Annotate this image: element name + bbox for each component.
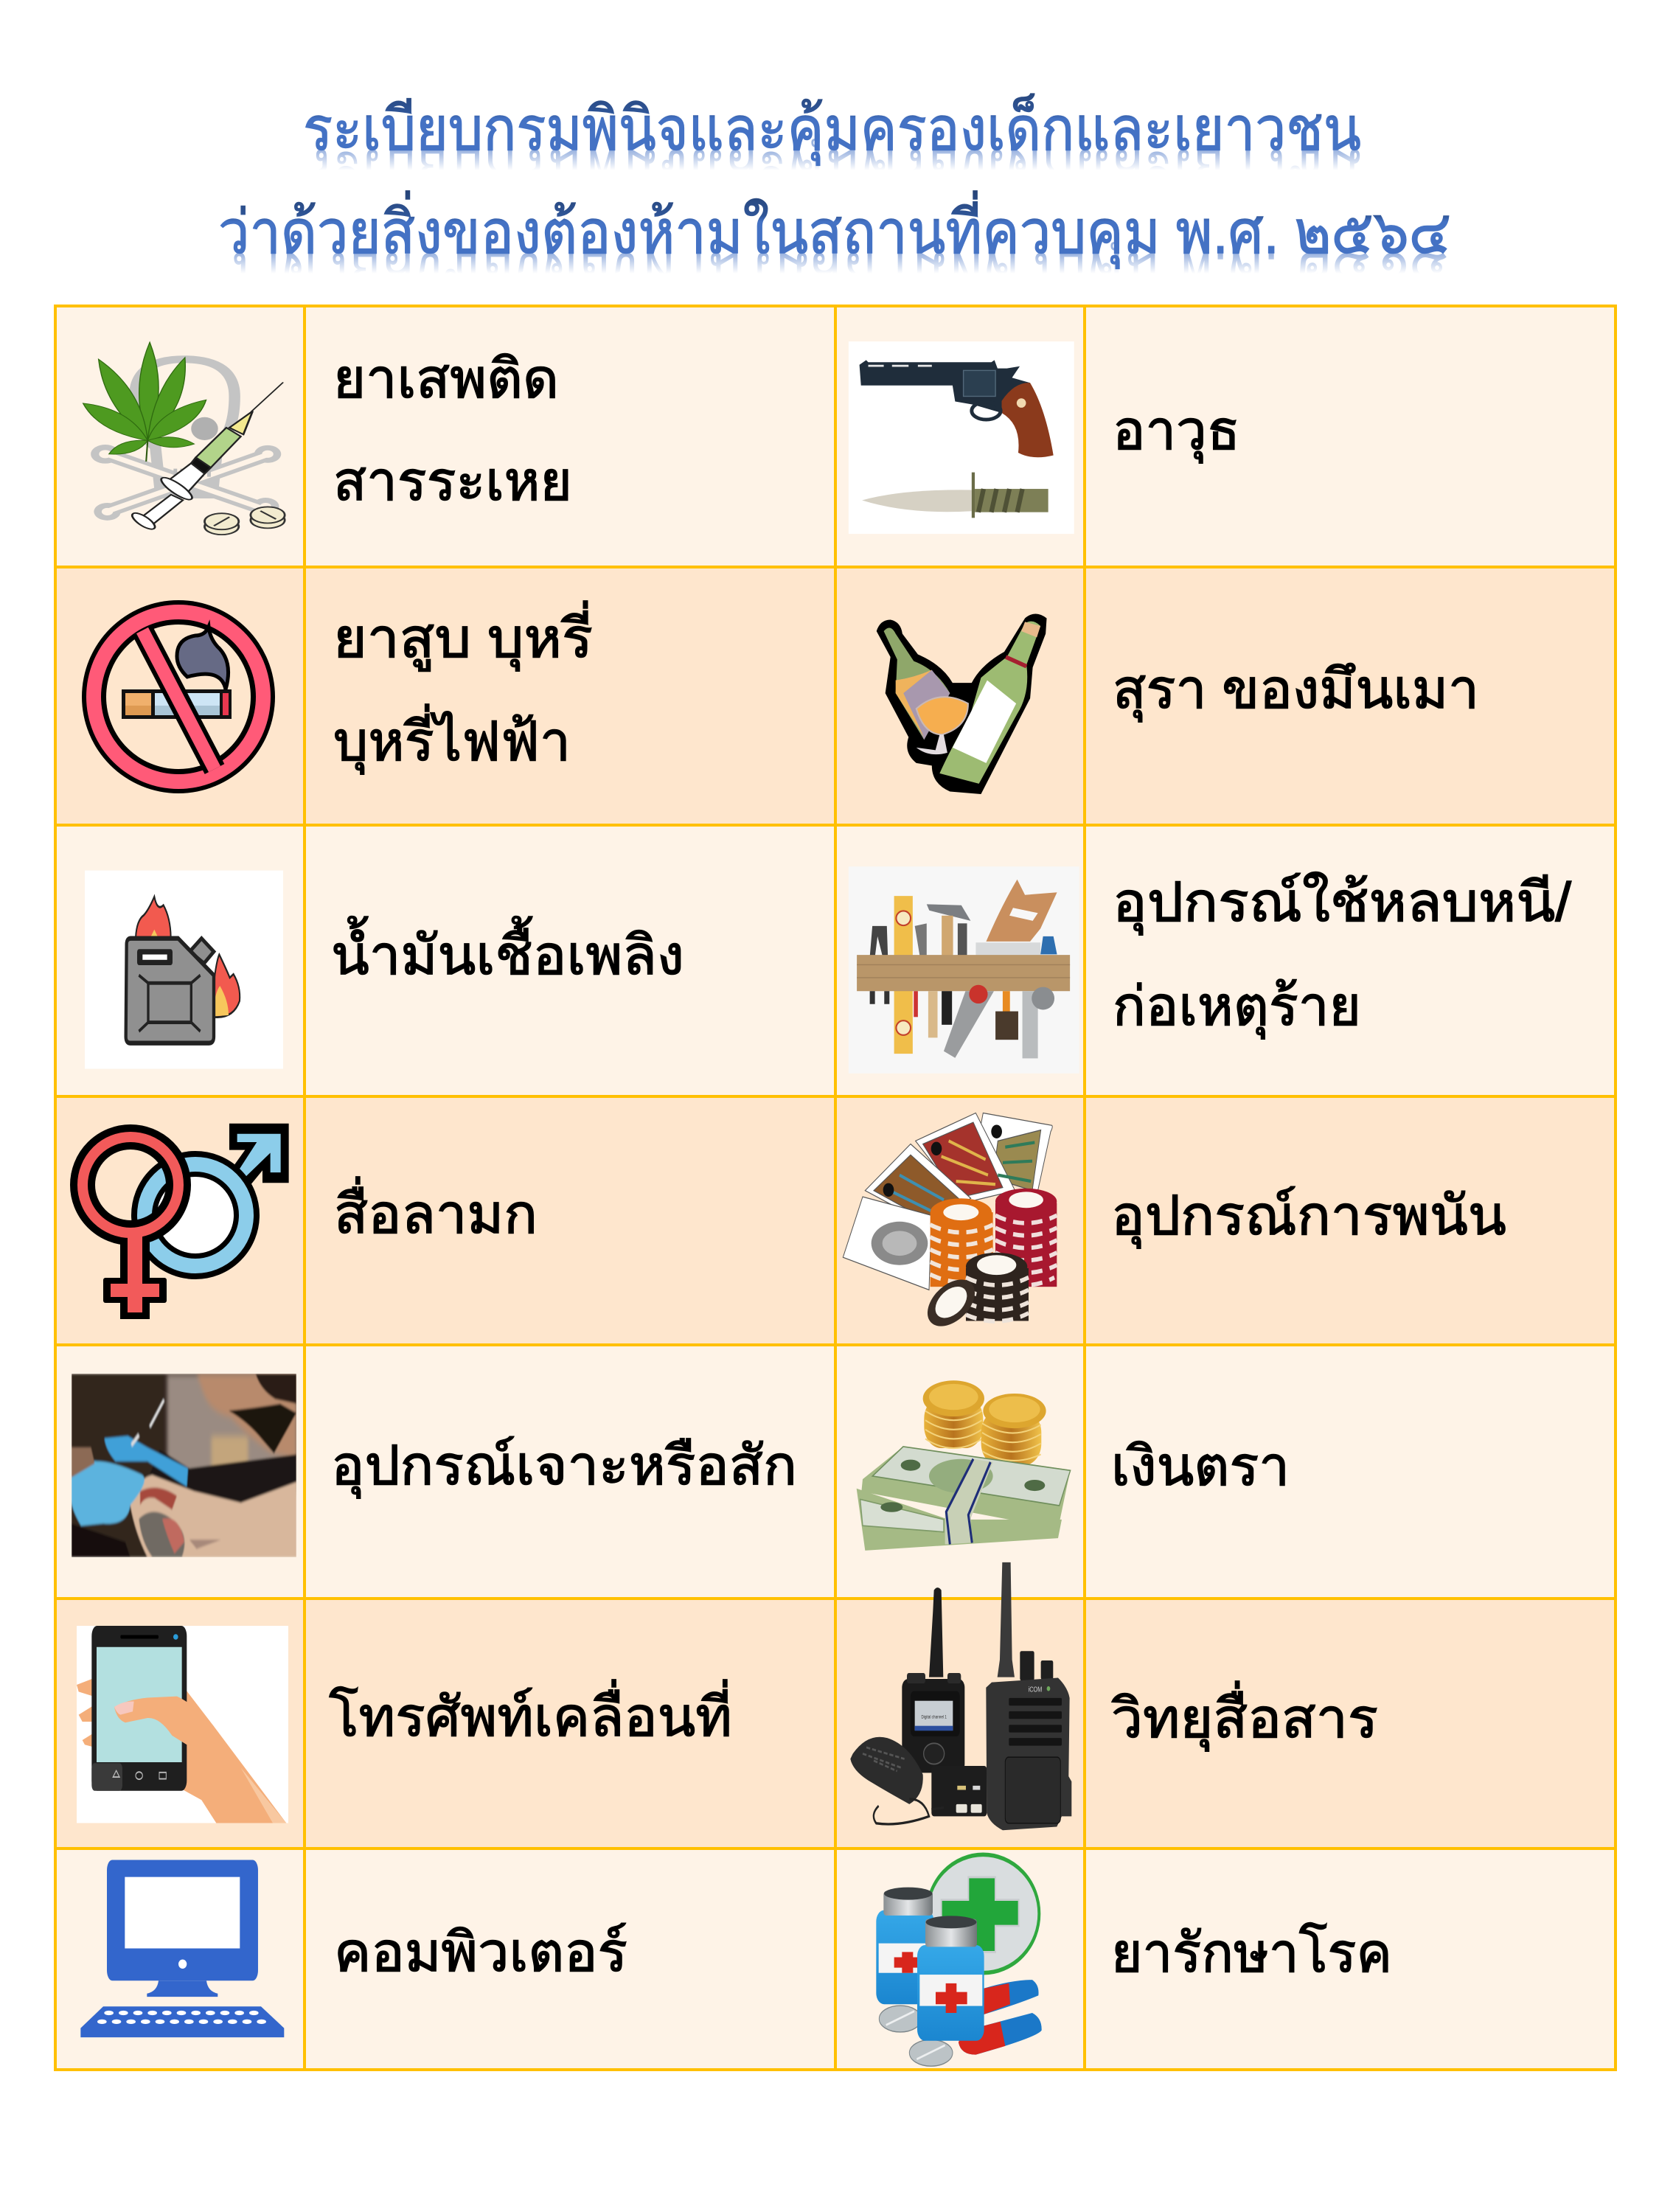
label: gambling equipment: อุปกรณ์การพนัน (1111, 1185, 1506, 1249)
icon: coins and cash (857, 1380, 1071, 1551)
label: narcotics (333, 348, 572, 512)
label: tobacco: ยาสูบ บุหรี่ (333, 600, 593, 672)
label: tobacco: บุหรี่ไฟฟ้า (333, 703, 571, 775)
icon: playing cards and chips (843, 1113, 1057, 1336)
label: weapons: อาวุธ (1113, 400, 1240, 464)
label: narcotics: ยาเสพติด (333, 348, 559, 409)
icon: tattoo photo (72, 1374, 296, 1557)
icon: phone in hand (77, 1626, 288, 1823)
label: alcohol: สุรา ของมึนเมา (1113, 658, 1479, 723)
label: narcotics: สารระเหย (333, 451, 572, 512)
title: ว่าด้วยสิ่งของต้องห้ามในสถานที่ควบคุม พ.ศ. ๒๕๖๔ (218, 237, 1451, 316)
label: radio: วิทยุสื่อสาร (1111, 1680, 1378, 1752)
label: piercing and tattoo equipment: อุปกรณ์เจาะหรือสัก (331, 1435, 797, 1499)
icon: walkie talkies: iCOM (1029, 1685, 1042, 1694)
label: mobile phone: โทรศัพท์เคลื่อนที่ (329, 1679, 732, 1747)
label: escape or crime tools: อุปกรณ์ใช้หลบหนี/ (1113, 872, 1571, 936)
title: ระเบียบกรมพินิจและคุ้มครองเด็กและเยาวชน (303, 133, 1361, 206)
label: pornography: สื่อลามก (334, 1176, 538, 1245)
label: escape or crime tools: ก่อเหตุร้าย (1113, 975, 1361, 1040)
title: ระเบียบกรมพินิจและคุ้มครองเด็กและเยาวชน (303, 93, 1361, 166)
icon: gender symbols (83, 1124, 288, 1319)
label: fuel: น้ำมันเชื้อเพลิง (331, 916, 684, 986)
label: medicine: ยารักษาโรค (1111, 1922, 1392, 1983)
icon: walkie talkies: Digital channel 1 (921, 1715, 947, 1720)
label: computer: คอมพิวเตอร์ (334, 1921, 627, 1983)
icon: no smoking (82, 600, 275, 793)
label: escape or crime tools (1113, 872, 1571, 1040)
icon: walkie talkies (850, 1562, 1071, 1830)
label: currency: เงินตรา (1111, 1436, 1290, 1497)
icon: revolver and knife (849, 341, 1074, 534)
icon: drugs skull leaf syringe (83, 342, 285, 535)
icon: liquor bottles (877, 613, 1047, 794)
icon: burning fuel can (85, 871, 283, 1069)
icon: tools on wooden plank (849, 866, 1079, 1074)
icon: computer (80, 1860, 284, 2037)
title: ว่าด้วยสิ่งของต้องห้ามในสถานที่ควบคุม พ.ศ. ๒๕๖๔ (218, 190, 1451, 269)
title (218, 93, 1451, 316)
icon: medicine (876, 1854, 1042, 2066)
label: tobacco (333, 600, 593, 775)
table grid (54, 305, 1617, 2071)
